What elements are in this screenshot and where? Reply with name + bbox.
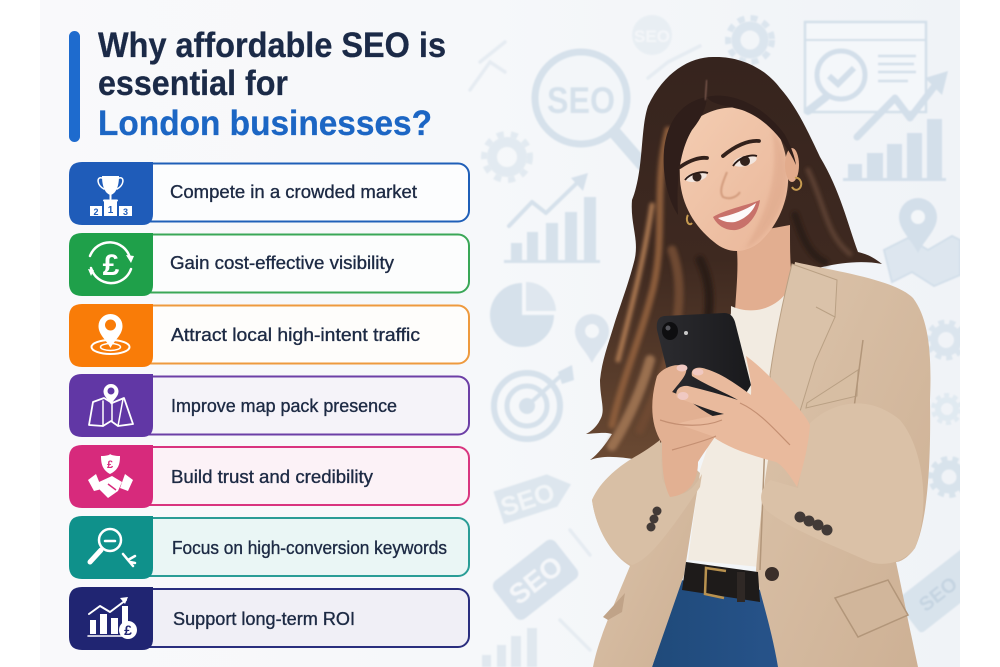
right sleeve — [761, 403, 923, 564]
background SEO icon pattern — [470, 15, 992, 667]
icon: SEO magnifier: SEO — [547, 80, 615, 121]
icon: SEO tag right: SEO — [915, 573, 962, 616]
row: compete in a crowded market — [69, 162, 469, 225]
icon: gear top — [728, 18, 772, 62]
fingernails — [676, 364, 704, 400]
icon: growth arrow and bars top right — [843, 71, 948, 180]
hands — [652, 356, 810, 497]
icon: bar chart bottom — [482, 628, 537, 667]
icon: shield and handshake: £ — [107, 459, 113, 471]
icon: small map pin — [575, 314, 609, 363]
title: Why affordable SEO is — [98, 26, 446, 65]
icon: pound with circular arrows: £ — [103, 249, 120, 282]
icon: faint SEO badge top: SEO — [634, 27, 670, 46]
row: gain cost-effective visibility — [69, 233, 469, 296]
pocket flap — [835, 580, 908, 637]
row: attract local high-intent traffic — [69, 304, 469, 367]
row: support long-term ROI: Support long-term ROI — [173, 609, 355, 629]
icon: gear right middle — [933, 395, 961, 423]
hair part — [705, 80, 707, 100]
face shadow — [745, 130, 787, 249]
icon: growth bars with pound coin: £ — [124, 622, 132, 638]
phone — [657, 313, 751, 425]
left sleeve — [592, 440, 702, 565]
icon: gear right lower — [931, 459, 967, 495]
jacket lapel — [770, 264, 837, 440]
jacket body right — [756, 262, 930, 667]
icon: trophy and podium: 2 — [93, 207, 99, 217]
row: improve map pack presence: Improve map pack presence — [171, 396, 397, 416]
icon: SEO tag lower: SEO — [503, 550, 569, 611]
row: focus on high-conversion keywords — [69, 516, 469, 579]
icon: SEO tag lower — [492, 540, 578, 620]
earrings — [687, 178, 801, 224]
face — [679, 107, 788, 251]
icon: trophy and podium — [90, 176, 132, 217]
lips — [713, 200, 760, 230]
icon: map pin and folded map — [884, 198, 960, 286]
belt — [682, 562, 760, 602]
row: attract local high-intent traffic: Attract local high-intent traffic — [171, 325, 420, 345]
teeth — [718, 203, 756, 222]
icon: trophy and podium: 3 — [123, 207, 128, 217]
hair highlights — [612, 130, 850, 446]
icon: SEO tag right — [903, 550, 960, 632]
icon: magnifier with key — [90, 529, 135, 566]
hair back — [586, 57, 882, 462]
chest pocket — [806, 370, 858, 408]
icon: browser window with check — [805, 22, 926, 112]
jacket button — [765, 567, 779, 581]
icon: trophy and podium: 1 — [108, 205, 114, 216]
neck — [735, 225, 797, 325]
left pocket flap — [603, 593, 625, 620]
icon: gear right upper — [928, 322, 964, 358]
jacket body left — [592, 440, 700, 667]
right hand — [676, 356, 810, 487]
icon: pie chart — [490, 282, 556, 347]
phone camera — [662, 322, 688, 340]
icon: folded map with pin — [89, 384, 133, 426]
icon: shield and handshake — [88, 454, 133, 498]
icon: pound with circular arrows — [88, 242, 134, 283]
row: focus on high-conversion keywords: Focus on high-conversion keywords — [172, 538, 447, 558]
icon: gear left — [484, 134, 530, 180]
row: improve map pack presence — [69, 374, 469, 437]
jeans — [652, 580, 780, 667]
ear — [785, 148, 799, 182]
hair front — [664, 96, 796, 215]
person: woman with smartphone — [586, 57, 930, 667]
faint decorative marks — [470, 42, 700, 650]
left content column — [69, 26, 469, 650]
nose — [721, 172, 740, 198]
title: essential for — [98, 64, 288, 103]
row: compete in a crowded market: Compete in a crowded market — [170, 182, 417, 202]
jacket seams — [760, 340, 863, 570]
icon: location pin with rings — [92, 314, 130, 354]
row: build trust and credibility — [69, 445, 469, 508]
title: London businesses? — [98, 104, 432, 143]
icon: faint SEO badge top — [632, 15, 672, 55]
belt loop — [737, 572, 745, 602]
row: build trust and credibility: Build trust and credibility — [171, 467, 373, 487]
row: support long-term ROI — [69, 587, 469, 650]
eyebrows — [680, 141, 759, 167]
title — [98, 26, 446, 143]
belt buckle — [705, 568, 726, 598]
sleeve buttons right — [794, 512, 832, 536]
sleeve buttons left — [646, 506, 662, 532]
title accent bar — [69, 31, 80, 142]
sweater — [688, 292, 800, 567]
icon: target — [494, 365, 574, 439]
icon: bar chart middle — [504, 173, 600, 262]
row: gain cost-effective visibility: Gain cost-effective visibility — [170, 253, 394, 273]
icon: growth bars with pound coin — [88, 597, 137, 639]
eyes — [684, 153, 758, 184]
left hand — [652, 365, 722, 497]
icon: SEO magnifier — [535, 52, 642, 164]
icon: SEO tag: SEO — [497, 477, 558, 522]
